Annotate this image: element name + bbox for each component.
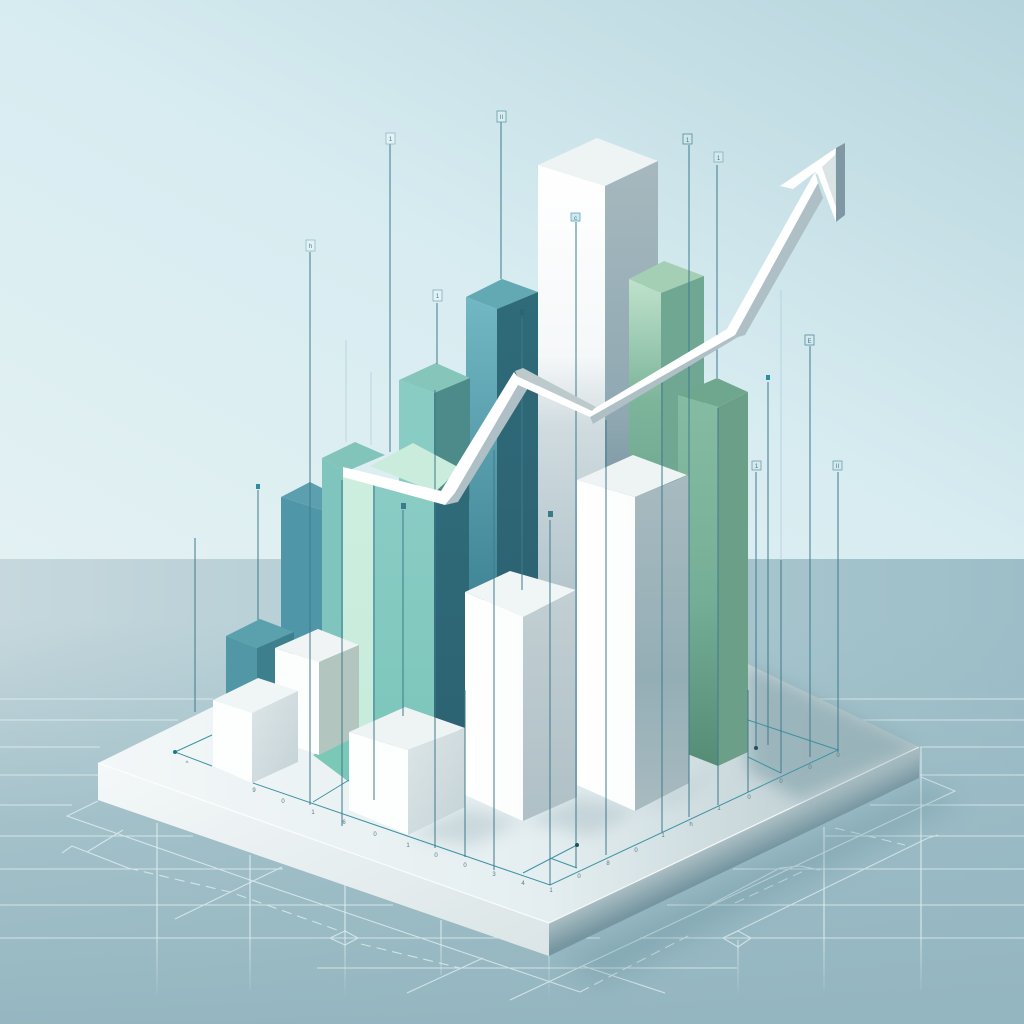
axis tick labels: 0 xyxy=(281,799,285,805)
axis tick labels: 1 xyxy=(406,843,410,849)
axis tick labels: 1 xyxy=(549,888,553,894)
callout marker 9: 1 xyxy=(755,464,759,470)
bar: front green xyxy=(678,378,748,766)
callout marker 6: 1 xyxy=(686,138,690,144)
axis tick labels: 0 xyxy=(779,779,783,785)
floor blueprint grid xyxy=(0,699,1024,1005)
axis tick labels: 0 xyxy=(434,853,438,859)
axis tick labels: 0 xyxy=(836,753,840,759)
bar: mid teal-green xyxy=(399,363,470,500)
bar base shadows xyxy=(408,766,718,846)
callout marker 6 xyxy=(683,134,692,144)
background: floor xyxy=(0,559,1024,1024)
callout marker 8: E xyxy=(807,339,812,345)
axis tick labels xyxy=(186,753,840,894)
axis tick labels: 0 xyxy=(747,795,751,801)
axis tick labels: 0 xyxy=(463,863,467,869)
callout marker 1: h xyxy=(309,244,312,250)
callout markers xyxy=(173,111,842,847)
axis tick labels: 3 xyxy=(492,872,496,878)
callout marker 1 xyxy=(306,240,315,251)
axis tick labels: 6 xyxy=(342,820,346,826)
callout marker 7: 1 xyxy=(717,156,721,162)
axis tick labels: 8 xyxy=(606,861,610,867)
callout marker 10 xyxy=(833,461,842,470)
axis tick labels: 0 xyxy=(577,874,581,880)
callout marker 8 xyxy=(805,335,814,345)
callout marker 2: 1 xyxy=(389,137,393,143)
callout marker 3: 1 xyxy=(436,294,440,300)
axis tick labels: 0 xyxy=(373,832,377,838)
bar: front mid white xyxy=(465,571,577,821)
axis tick labels: 1 xyxy=(311,810,315,816)
arrow head xyxy=(780,143,845,222)
axis tick labels: 1 xyxy=(717,806,721,812)
callout marker 5: c xyxy=(574,216,577,222)
growth arrow xyxy=(343,143,845,505)
callout marker 3 xyxy=(433,290,442,301)
faint background lines xyxy=(346,290,781,560)
axis tick labels: 0 xyxy=(634,848,638,854)
callout marker 5 xyxy=(571,213,580,222)
bar: small teal cube xyxy=(226,619,294,700)
callout marker 2 xyxy=(386,133,395,144)
shadow of platform on floor xyxy=(560,785,960,985)
cube: back white xyxy=(275,629,359,755)
bar: left teal xyxy=(281,482,322,650)
arrow top face xyxy=(343,172,818,505)
marker dots xyxy=(173,309,770,847)
axis tick labels: ^ xyxy=(186,761,189,767)
drop lines with callouts xyxy=(195,122,838,885)
axis tick labels: 9 xyxy=(252,788,256,794)
bar: front right white xyxy=(577,455,689,811)
bar: tall white xyxy=(538,138,658,620)
cube: front white xyxy=(349,707,465,835)
bar: wide mint and teal xyxy=(313,443,469,782)
bar: tall teal xyxy=(466,279,538,600)
axis tick labels: 1 xyxy=(661,833,665,839)
axis tick labels: 0 xyxy=(808,765,812,771)
platform xyxy=(98,555,919,956)
callout marker 9 xyxy=(752,461,761,470)
callout marker 4 xyxy=(497,111,506,122)
bar: small teal-green xyxy=(322,442,385,720)
callout marker 7 xyxy=(714,152,723,162)
axis tick labels: 4 xyxy=(521,881,525,887)
baseline on platform xyxy=(175,720,838,885)
callout marker 10: II xyxy=(836,464,839,470)
axis tick labels: h xyxy=(689,822,693,828)
callout marker 4: II xyxy=(500,115,503,121)
cube: left white xyxy=(213,678,298,783)
arrow side faces xyxy=(445,183,823,505)
bar: back green xyxy=(629,261,704,560)
background: sky xyxy=(0,0,1024,560)
